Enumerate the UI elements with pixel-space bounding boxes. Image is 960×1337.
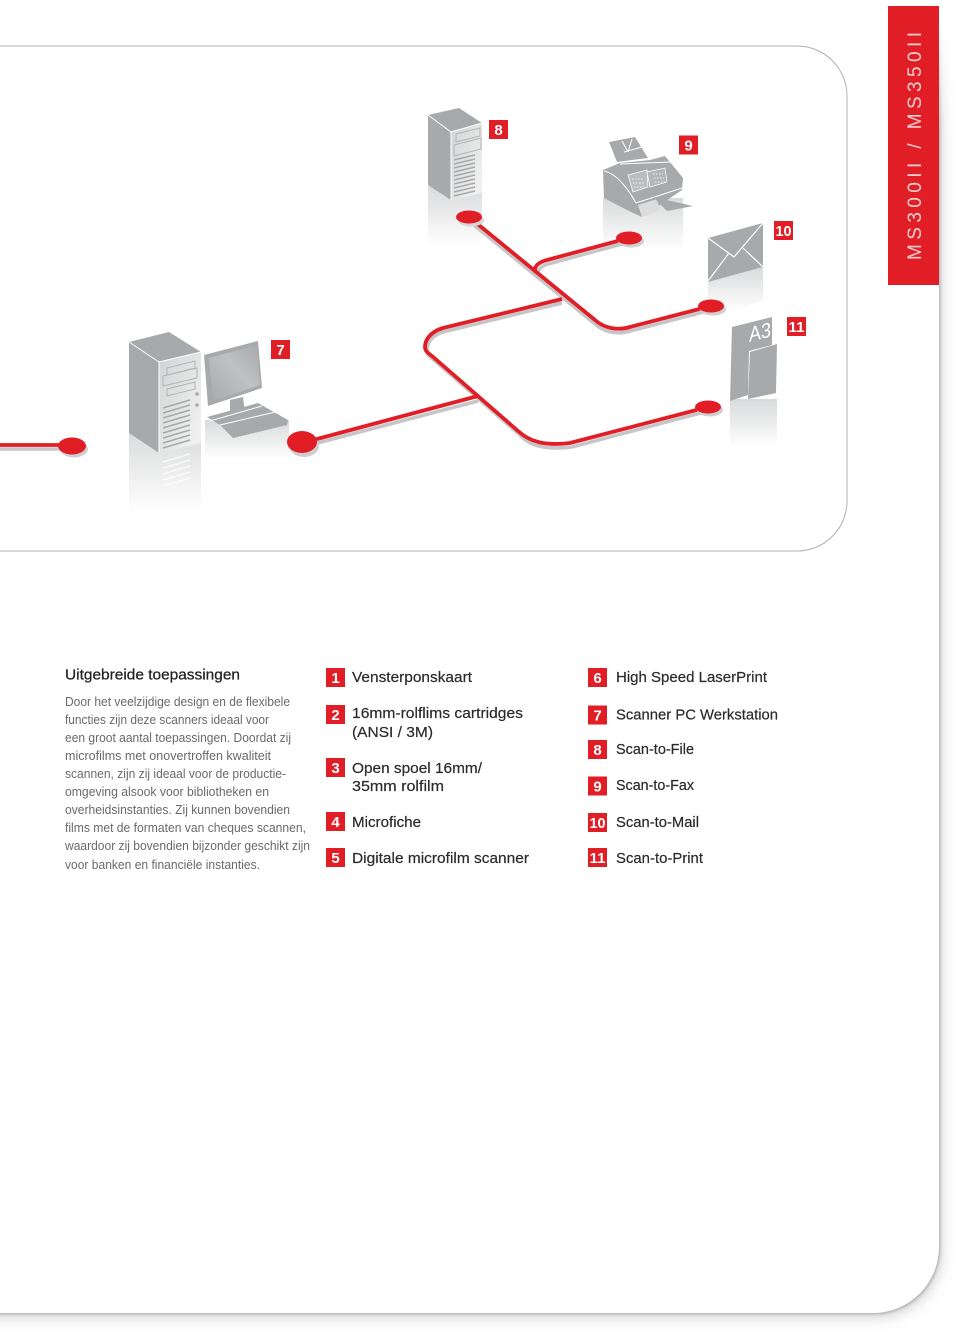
diagram number badges: 7 — [276, 342, 285, 359]
legend: items 6 to 11: Scan-to-Mail — [616, 814, 699, 831]
body text block: microfilms met onovertroffen kwaliteit — [65, 749, 272, 763]
legend: items 1 to 5: (ANSI / 3M) — [352, 724, 433, 741]
red side tab with model name — [888, 6, 939, 285]
legend: items 1 to 5: Open spoel 16mm/ — [352, 760, 483, 777]
icon: envelope — [708, 223, 763, 312]
legend: items 1 to 5 — [326, 668, 529, 867]
body text block: een groot aantal toepassingen. Doordat zij — [65, 731, 291, 745]
legend: items 6 to 11: 7 — [593, 708, 602, 724]
legend: items 1 to 5: 2 — [331, 707, 340, 724]
legend: items 1 to 5: 1 — [331, 670, 340, 687]
icon: A3 paper sheets: A3 — [749, 318, 771, 347]
icon: A3 paper sheets — [730, 317, 777, 447]
legend: items 1 to 5: Vensterponskaart — [352, 669, 473, 686]
legend: items 6 to 11: 6 — [593, 670, 602, 687]
body text block: Door het veelzijdige design en de flexibele — [65, 695, 290, 709]
legend: items 6 to 11: High Speed LaserPrint — [616, 669, 768, 686]
legend: items 6 to 11: Scanner PC Werkstation — [616, 706, 778, 724]
legend: items 1 to 5: Microfiche — [352, 814, 421, 831]
red side tab with model name: MS300II / MS350II — [905, 32, 926, 260]
panel: workflow diagram frame — [0, 46, 847, 551]
diagram number badges: 10 — [776, 223, 792, 240]
body text block — [64, 695, 310, 872]
diagram number badges — [271, 120, 806, 359]
legend: items 6 to 11: 8 — [593, 742, 602, 759]
diagram number badges: 9 — [684, 138, 693, 154]
legend: items 6 to 11: 10 — [590, 815, 606, 832]
legend: items 1 to 5: Digitale microfilm scanner — [352, 850, 529, 867]
body text block: films met de formaten van cheques scannen, — [65, 821, 306, 835]
legend: items 6 to 11 — [588, 668, 778, 867]
body text block: overheidsinstanties. Zij kunnen bovendien — [65, 803, 290, 817]
icon: scanner PC workstation — [129, 332, 289, 512]
diagram number badges: 8 — [494, 122, 503, 139]
body text block: omgeving alsook voor bibliotheken en — [65, 785, 269, 799]
legend: items 6 to 11: 11 — [590, 850, 606, 867]
connector lines — [0, 217, 711, 445]
legend: items 6 to 11: Scan-to-Fax — [616, 777, 694, 794]
legend: items 1 to 5: 16mm-rolflims cartridges — [352, 705, 523, 722]
legend: items 1 to 5: 35mm rolfilm — [352, 778, 444, 795]
heading: Uitgebreide toepassingen — [65, 668, 240, 684]
legend: items 1 to 5: 4 — [331, 814, 340, 831]
icon: file server — [428, 108, 482, 246]
legend: items 6 to 11: 9 — [593, 778, 602, 796]
body text block: scannen, zijn zij ideaal voor de productie- — [65, 767, 286, 781]
legend: items 1 to 5: 3 — [331, 760, 340, 777]
icon: fax machine — [603, 137, 693, 250]
body text block: functies zijn deze scanners ideaal voor — [65, 713, 269, 727]
diagram number badges: 11 — [788, 319, 804, 336]
legend: items 6 to 11: Scan-to-Print — [616, 850, 704, 867]
body text block: waardoor zij bovendien bijzonder geschikt zijn — [64, 839, 310, 853]
legend: items 6 to 11: Scan-to-File — [616, 741, 694, 758]
body text block: voor banken en financiële instanties. — [65, 858, 260, 872]
connector end dots — [58, 210, 726, 458]
connector line shadows — [0, 221, 711, 449]
legend: items 1 to 5: 5 — [331, 850, 340, 867]
